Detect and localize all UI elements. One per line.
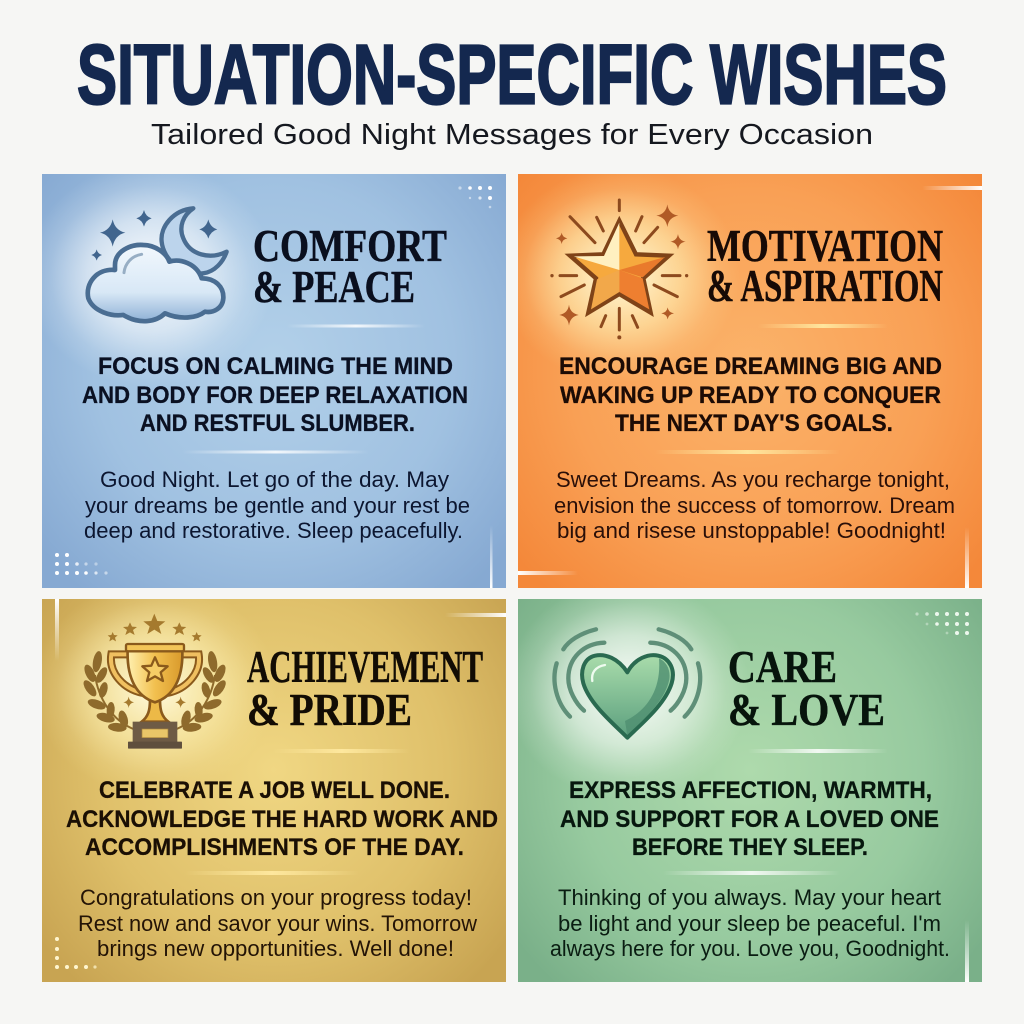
message xyxy=(84,467,470,543)
message: Thinking of you always. May your heart xyxy=(558,885,942,910)
heading: motivation and aspiration: & ASPIRATION xyxy=(707,261,943,311)
focus statement xyxy=(82,353,468,437)
decoration: light stripes xyxy=(922,186,982,190)
focus statement: CELEBRATE A JOB WELL DONE. xyxy=(99,777,450,804)
focus statement: AND SUPPORT FOR A LOVED ONE xyxy=(560,806,939,833)
heading: motivation and aspiration: MOTIVATION xyxy=(707,221,943,271)
message: Sweet Dreams. As you recharge tonight, xyxy=(556,467,950,492)
focus statement: EXPRESS AFFECTION, WARMTH, xyxy=(569,777,932,804)
focus statement: AND RESTFUL SLUMBER. xyxy=(140,410,415,437)
focus statement: FOCUS ON CALMING THE MIND xyxy=(98,353,453,380)
heading: comfort and peace: COMFORT xyxy=(253,221,447,271)
focus statement: AND BODY FOR DEEP RELAXATION xyxy=(82,382,468,409)
focus statement: THE NEXT DAY'S GOALS. xyxy=(615,410,893,437)
panel: achievement and pride xyxy=(33,580,506,982)
heading: care and love: & LOVE xyxy=(728,685,885,735)
message: your dreams be gentle and your rest be xyxy=(85,493,470,518)
heading: achievement and pride xyxy=(247,642,483,735)
message: Congratulations on your progress today! xyxy=(80,885,472,910)
message xyxy=(78,885,478,961)
message: Rest now and savor your wins. Tomorrow xyxy=(78,911,478,936)
message: Good Night. Let go of the day. May xyxy=(100,467,450,492)
icon: heart with waves xyxy=(554,629,700,738)
focus statement: ACKNOWLEDGE THE HARD WORK AND xyxy=(66,806,498,833)
message: big and risese unstoppable! Goodnight! xyxy=(557,518,946,543)
icon: star with rays xyxy=(550,200,688,339)
heading: comfort and peace: & PEACE xyxy=(253,262,415,312)
heading: comfort and peace xyxy=(253,221,447,312)
decoration: dots and stripe xyxy=(915,612,969,982)
heading: motivation and aspiration xyxy=(707,221,943,311)
message: be light and your sleep be peaceful. I'm xyxy=(558,911,941,936)
focus statement: WAKING UP READY TO CONQUER xyxy=(560,382,941,409)
focus statement xyxy=(560,777,939,861)
divider xyxy=(655,450,840,454)
focus statement xyxy=(66,777,498,861)
heading: achievement and pride: ACHIEVEMENT xyxy=(247,642,483,692)
divider xyxy=(185,871,359,875)
panel: care and love xyxy=(506,580,982,982)
focus statement xyxy=(559,353,942,437)
focus statement: ACCOMPLISHMENTS OF THE DAY. xyxy=(85,834,464,861)
message: envision the success of tomorrow. Dream xyxy=(554,493,955,518)
message: brings new opportunities. Well done! xyxy=(97,936,454,961)
decoration: light stripe xyxy=(490,525,492,588)
heading: care and love: CARE xyxy=(728,642,837,692)
panel: motivation and aspiration xyxy=(500,167,982,588)
icon: trophy with laurel xyxy=(81,614,228,749)
decoration: dots xyxy=(55,186,492,575)
panel: comfort and peace xyxy=(25,163,506,588)
subtitle: Tailored Good Night Messages for Every Occasion xyxy=(151,119,873,151)
divider xyxy=(748,749,888,753)
message: always here for you. Love you, Goodnight. xyxy=(550,936,950,961)
focus statement: BEFORE THEY SLEEP. xyxy=(632,834,868,861)
icon: moon and cloud xyxy=(88,208,227,321)
message xyxy=(554,467,955,543)
focus statement: ENCOURAGE DREAMING BIG AND xyxy=(559,353,942,380)
heading: care and love xyxy=(728,642,885,735)
divider xyxy=(287,324,425,328)
divider xyxy=(663,871,840,875)
decoration: light stripes and dots xyxy=(55,599,506,969)
heading: achievement and pride: & PRIDE xyxy=(247,685,412,735)
message xyxy=(550,885,950,961)
divider xyxy=(182,450,369,454)
divider xyxy=(273,749,410,753)
divider xyxy=(758,324,888,328)
message: deep and restorative. Sleep peacefully. xyxy=(84,518,463,543)
